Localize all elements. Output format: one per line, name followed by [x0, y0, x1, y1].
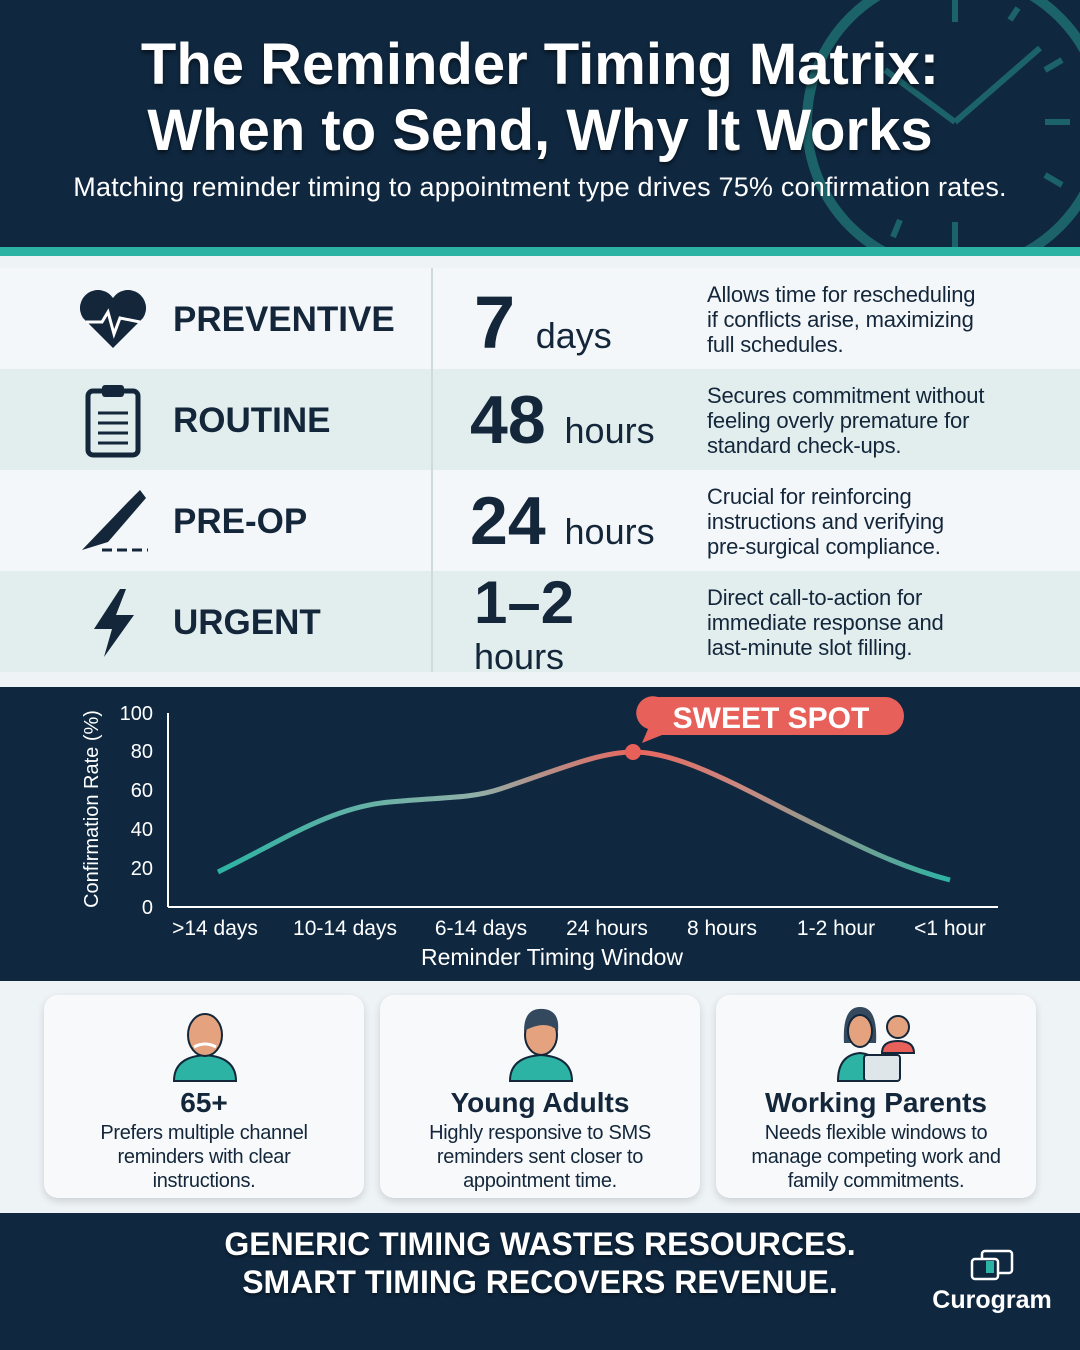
- line chart: >14 days: [172, 917, 258, 940]
- line chart: 40: [131, 819, 153, 841]
- row: preventive: Allows time for rescheduling: [707, 282, 975, 307]
- row: routine: Secures commitment without: [707, 383, 984, 408]
- row: pre-op: pre-surgical compliance.: [707, 534, 941, 559]
- line chart: 1-2 hour: [797, 917, 875, 940]
- line chart: 60: [131, 780, 153, 802]
- icon: parents: [837, 1007, 915, 1082]
- row: routine: ROUTINE: [173, 401, 330, 440]
- footer slogan: [224, 1226, 856, 1300]
- footer slogan: SMART TIMING RECOVERS REVENUE.: [242, 1264, 838, 1300]
- icon: young adult: [509, 1008, 573, 1082]
- icon: senior: [173, 1013, 237, 1082]
- matrix table: [0, 268, 1080, 677]
- callout: sweet spot: [636, 696, 904, 743]
- icon: lightning: [94, 589, 134, 657]
- row: urgent: [0, 571, 1080, 672]
- row: preventive: [0, 268, 1080, 369]
- line chart: Confirmation Rate (%): [81, 710, 103, 908]
- card: young adults: [380, 995, 700, 1198]
- row: urgent: hours: [474, 636, 564, 677]
- line chart: 8 hours: [687, 917, 757, 940]
- card: 65+: 65+: [180, 1087, 228, 1118]
- line chart: <1 hour: [914, 917, 986, 940]
- row: urgent: immediate response and: [707, 610, 944, 635]
- line chart: 80: [131, 741, 153, 763]
- row: urgent: 1–2: [474, 569, 574, 636]
- logo: curogram: Curogram: [932, 1286, 1052, 1314]
- row: preventive: 7 days: [474, 281, 612, 364]
- line chart: 100: [120, 703, 153, 725]
- footer slogan: GENERIC TIMING WASTES RESOURCES.: [224, 1226, 856, 1262]
- card: working parents: [716, 995, 1036, 1198]
- icon: clipboard: [86, 385, 140, 458]
- row: pre-op: PRE-OP: [173, 502, 307, 541]
- row: urgent: URGENT: [173, 603, 321, 642]
- row: urgent: Direct call-to-action for: [707, 585, 922, 610]
- footer: [0, 1213, 1080, 1350]
- icon: scalpel: [82, 490, 148, 552]
- subtitle: Matching reminder timing to appointment type drives 75% confirmation rates.: [73, 172, 1007, 202]
- card: working parents: Needs flexible windows to manage competing work and family commitments.: [751, 1122, 1001, 1192]
- row: preventive: PREVENTIVE: [173, 300, 395, 339]
- chart panel: [0, 687, 1080, 981]
- line chart: Reminder Timing Window: [421, 944, 683, 970]
- header: [0, 0, 1080, 247]
- row: routine: standard check-ups.: [707, 433, 901, 458]
- line chart: 20: [131, 858, 153, 880]
- line chart: 10-14 days: [293, 917, 397, 940]
- card: young adults: Highly responsive to SMS reminders sent closer to appointment time.: [429, 1122, 651, 1192]
- logo: curogram: [932, 1250, 1052, 1314]
- card: young adults: Young Adults: [451, 1087, 629, 1118]
- row: preventive: full schedules.: [707, 332, 843, 357]
- line chart: [81, 696, 998, 970]
- line chart: 24 hours: [566, 917, 648, 940]
- icon: clock: [802, 0, 1080, 247]
- row: pre-op: instructions and verifying: [707, 509, 944, 534]
- line chart: 0: [142, 897, 153, 919]
- card: working parents: Working Parents: [765, 1087, 987, 1118]
- title: When to Send, Why It Works: [147, 98, 933, 163]
- row: pre-op: 24 hours: [470, 483, 655, 559]
- row: pre-op: Crucial for reinforcing: [707, 484, 911, 509]
- callout: sweet spot: SWEET SPOT: [673, 702, 869, 735]
- row: routine: [0, 369, 1080, 470]
- icon: heart: [80, 290, 146, 348]
- row: pre-op: [0, 470, 1080, 571]
- row: routine: feeling overly premature for: [707, 408, 969, 433]
- title: The Reminder Timing Matrix:: [141, 32, 939, 97]
- card: 65+: Prefers multiple channel reminders with clear instructions.: [100, 1122, 308, 1192]
- row: urgent: last-minute slot filling.: [707, 635, 912, 660]
- title: [140, 32, 939, 166]
- row: routine: 48 hours: [470, 382, 655, 458]
- row: preventive: if conflicts arise, maximizing: [707, 307, 974, 332]
- card: 65+: [44, 995, 364, 1198]
- line chart: 6-14 days: [435, 917, 527, 940]
